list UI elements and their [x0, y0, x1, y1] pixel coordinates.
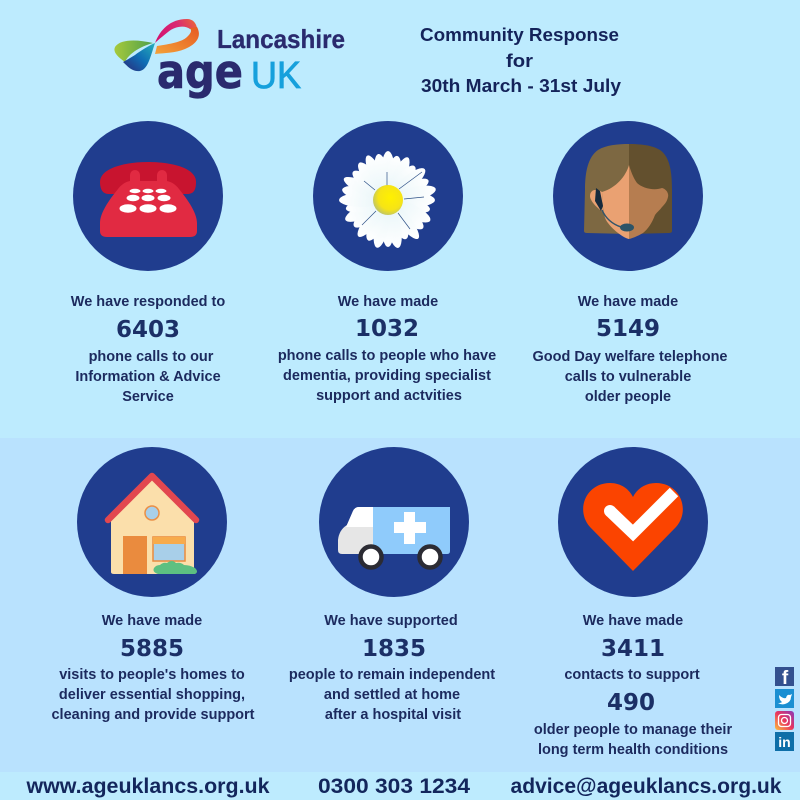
logo word: Lancashire: Lancashire — [217, 24, 345, 54]
icon: daisy — [313, 121, 463, 271]
text: responded: We have responded to — [71, 294, 225, 310]
logo ribbon — [114, 19, 199, 71]
icon: twitter — [775, 689, 794, 708]
description: welfare — [532, 349, 728, 405]
description: information service: Information & Advice — [75, 369, 221, 385]
icon: ambulance — [319, 447, 469, 597]
icon: call centre agent — [553, 121, 703, 271]
description: information service: Service — [122, 389, 174, 405]
phone: 0300 303 1234 — [318, 775, 470, 798]
description: information service: phone calls to our — [89, 349, 214, 365]
icon: instagram — [775, 711, 794, 730]
text: we have made: We have made — [578, 294, 678, 310]
description: welfare: older people — [585, 389, 671, 405]
icon: heart with tick — [558, 447, 708, 597]
logo word: UK: UK — [251, 55, 301, 97]
description: independence: after a hospital visit — [325, 707, 461, 723]
number: 6403: 6403 — [116, 317, 180, 343]
text: we have made: We have made — [102, 613, 202, 629]
description: long term conditions — [534, 722, 732, 758]
panel: health contacts — [534, 447, 732, 758]
panel: dementia calls — [278, 121, 496, 404]
email: advice@ageuklancs.org.uk — [510, 775, 782, 798]
number: 490: 490 — [607, 690, 655, 716]
description: visits — [51, 667, 255, 723]
text: contacts: contacts to support — [564, 667, 700, 683]
number: 5885: 5885 — [120, 636, 184, 662]
text: we have made: We have made — [338, 294, 438, 310]
description: dementia: phone calls to people who have — [278, 348, 496, 364]
icon: linkedin: in — [778, 734, 791, 750]
panel: home visits — [51, 447, 255, 723]
title: for — [506, 50, 533, 71]
description: long term conditions: long term health conditions — [538, 742, 728, 758]
description: visits: visits to people's homes to — [59, 667, 245, 683]
text: we have made: We have made — [583, 613, 683, 629]
logo word: age: age — [157, 45, 243, 100]
icon: facebook: f — [782, 668, 789, 689]
website: www.ageuklancs.org.uk — [25, 775, 270, 798]
footer contact bar — [25, 775, 782, 798]
title: 30th March - 31st July — [421, 75, 622, 96]
title — [420, 24, 622, 96]
description: independence — [289, 667, 495, 723]
number: 1032: 1032 — [355, 316, 419, 342]
number: 3411: 3411 — [601, 636, 665, 662]
description: visits: cleaning and provide support — [51, 707, 255, 723]
description: dementia: dementia, providing specialist — [283, 368, 491, 384]
number: 5149: 5149 — [596, 316, 660, 342]
description: independence: and settled at home — [324, 687, 460, 703]
panel: independence — [289, 447, 495, 723]
social icons — [775, 667, 794, 751]
icon: house — [77, 447, 227, 597]
logo: Age UK Lancashire — [114, 19, 345, 100]
description: information service — [75, 349, 221, 405]
description: dementia — [278, 348, 496, 404]
description: welfare: calls to vulnerable — [565, 369, 691, 385]
number: 1835: 1835 — [362, 636, 426, 662]
text: we have supported: We have supported — [324, 613, 458, 629]
description: dementia: support and actvities — [316, 388, 462, 404]
description: long term conditions: older people to manage their — [534, 722, 732, 738]
panel: welfare calls — [532, 121, 728, 405]
description: welfare: Good Day welfare telephone — [532, 349, 728, 365]
title: Community Response — [420, 24, 619, 45]
description: independence: people to remain independent — [289, 667, 495, 683]
icon: telephone — [73, 121, 223, 271]
description: visits: deliver essential shopping, — [59, 687, 245, 703]
panel: phone calls — [71, 121, 225, 405]
